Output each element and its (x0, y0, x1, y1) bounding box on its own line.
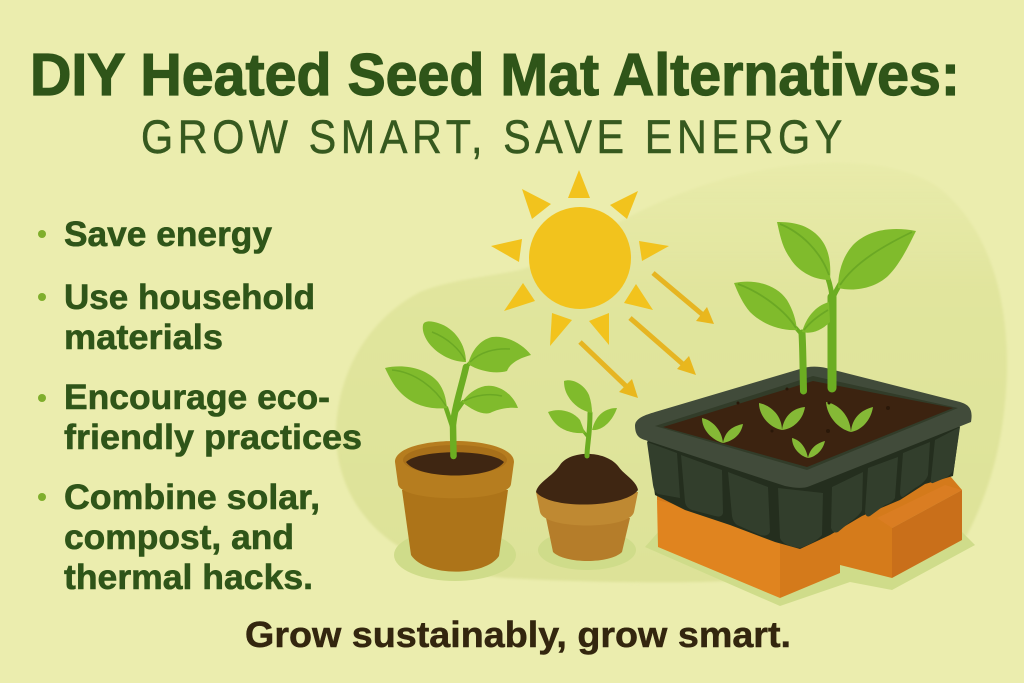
bullet: eco-friendly practices (38, 378, 362, 457)
bullet: solar compost thermal: Combine solar, (64, 478, 320, 517)
bullet: solar compost thermal (38, 478, 320, 597)
bullet: eco-friendly practices: friendly practices (64, 418, 362, 457)
plant: large pot (385, 321, 531, 581)
background blob (336, 163, 1007, 582)
bullet: household materials (38, 278, 315, 357)
bullet list (38, 215, 362, 597)
icon: sun (491, 170, 669, 346)
tray body (647, 425, 960, 549)
tray rim (635, 367, 972, 488)
bullet: eco-friendly practices: Encourage eco- (64, 378, 330, 417)
bullet: solar compost thermal: compost, and (64, 518, 294, 557)
plant: small pot (536, 380, 638, 570)
seedlings (702, 402, 873, 458)
bullet: household materials: Use household (64, 278, 315, 317)
bullet: household materials: materials (64, 318, 223, 357)
tagline: Grow sustainably, grow smart. (245, 614, 791, 655)
bullet: solar compost thermal: thermal hacks. (64, 558, 313, 597)
soil specks (736, 388, 890, 433)
bullet: save energy: Save energy (64, 215, 273, 254)
subtitle: GROW SMART, SAVE ENERGY (141, 112, 842, 164)
leaf veins (738, 224, 912, 330)
shadow (645, 530, 975, 606)
title: DIY Heated Seed Mat Alternatives: (30, 42, 960, 108)
seed tray on bricks (635, 222, 975, 606)
soil (655, 376, 958, 470)
bricks (657, 470, 962, 598)
stems (796, 268, 840, 391)
arrows: sun rays (580, 273, 714, 398)
leaves (734, 222, 916, 333)
